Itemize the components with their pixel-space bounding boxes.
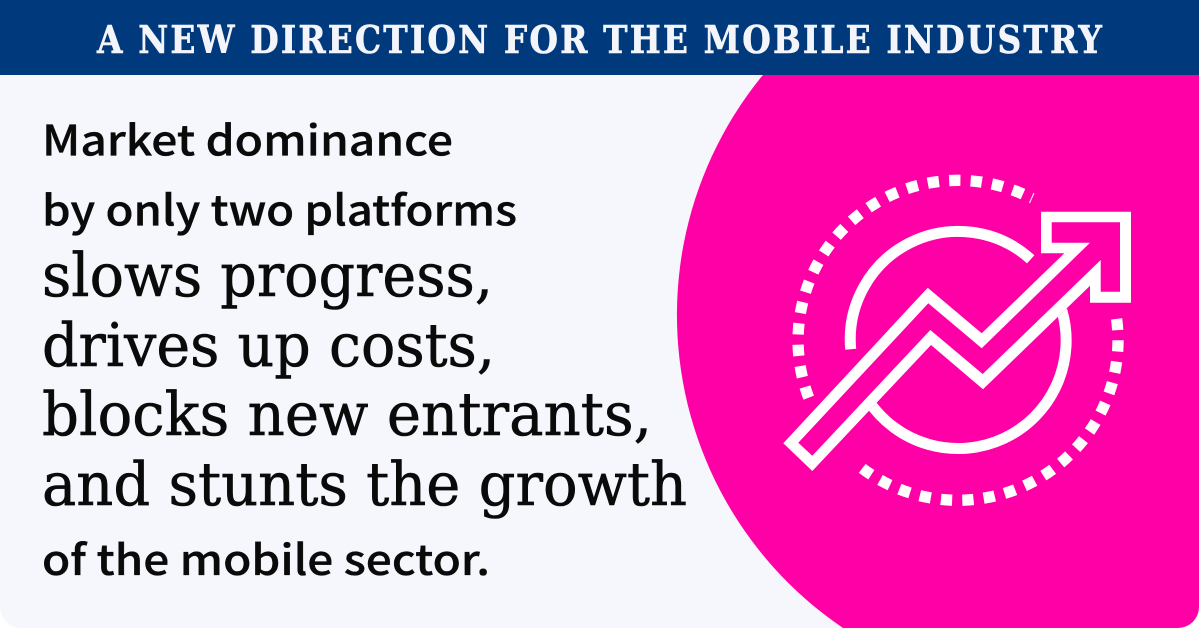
dotted ring xyxy=(798,180,1118,500)
line: mobile sector: of the mobile sector. xyxy=(42,527,490,588)
line: drives up costs: drives up costs, xyxy=(42,311,495,381)
icon: growth arrow with circle xyxy=(783,180,1131,500)
pink circle xyxy=(677,0,1199,628)
text block: statement xyxy=(42,108,687,588)
line: blocks new entrants: blocks new entrants, xyxy=(42,380,652,450)
arrow xyxy=(783,212,1131,471)
line: slows progress: slows progress, xyxy=(42,241,493,311)
line: stunts the growth: and stunts the growth xyxy=(42,450,687,520)
inner circle arcs xyxy=(850,231,1066,449)
line: two platforms: by only two platforms xyxy=(42,178,517,238)
line: market dominance: Market dominance xyxy=(42,108,453,168)
title banner xyxy=(0,0,1199,75)
